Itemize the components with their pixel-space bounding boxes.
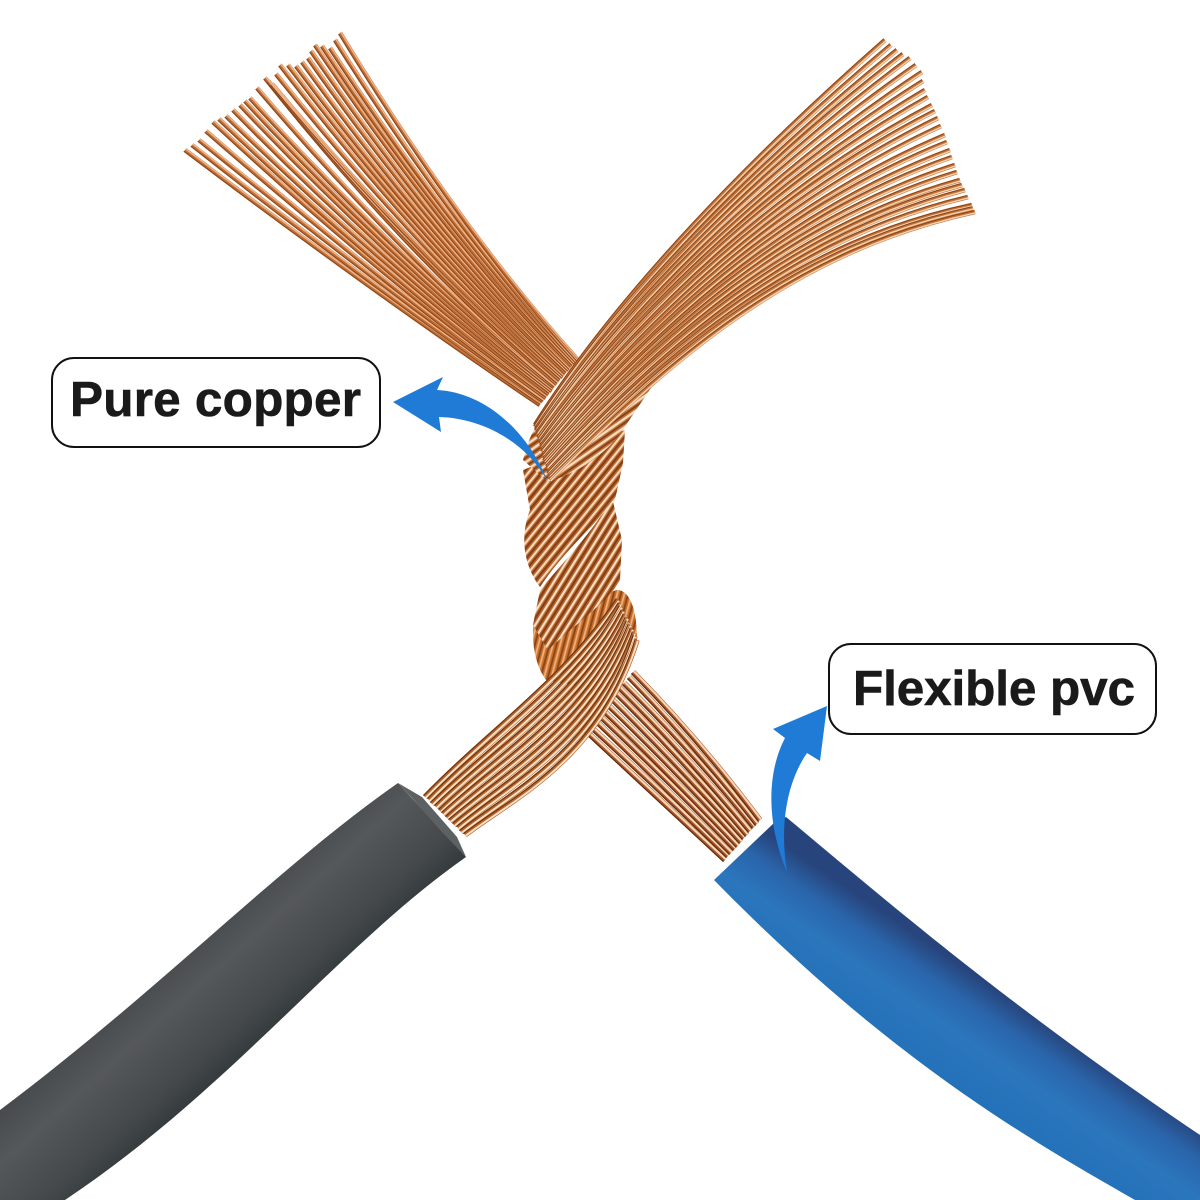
cable end face <box>398 783 466 857</box>
callout: pure copper <box>52 358 380 447</box>
cable end edge <box>727 815 768 860</box>
twist lobe: lower <box>533 590 637 690</box>
right copper strand fan <box>534 39 976 481</box>
callout: flexible pvc <box>829 644 1156 734</box>
copper twist <box>523 430 637 690</box>
arrow to flexible pvc <box>771 706 827 872</box>
left copper strand fan <box>184 32 579 406</box>
black cable <box>0 783 466 1200</box>
callout: pure copper: Pure copper <box>70 372 361 427</box>
arrow to pure copper <box>393 377 548 482</box>
callout: flexible pvc: Flexible pvc <box>853 661 1135 716</box>
twist lobe: middle <box>533 497 622 650</box>
lower right copper strands <box>583 671 761 862</box>
lower left copper strands <box>423 599 638 836</box>
twist lobe: upper <box>523 430 625 587</box>
blue cable <box>714 815 1200 1200</box>
upper band wrap over twist <box>523 345 680 482</box>
